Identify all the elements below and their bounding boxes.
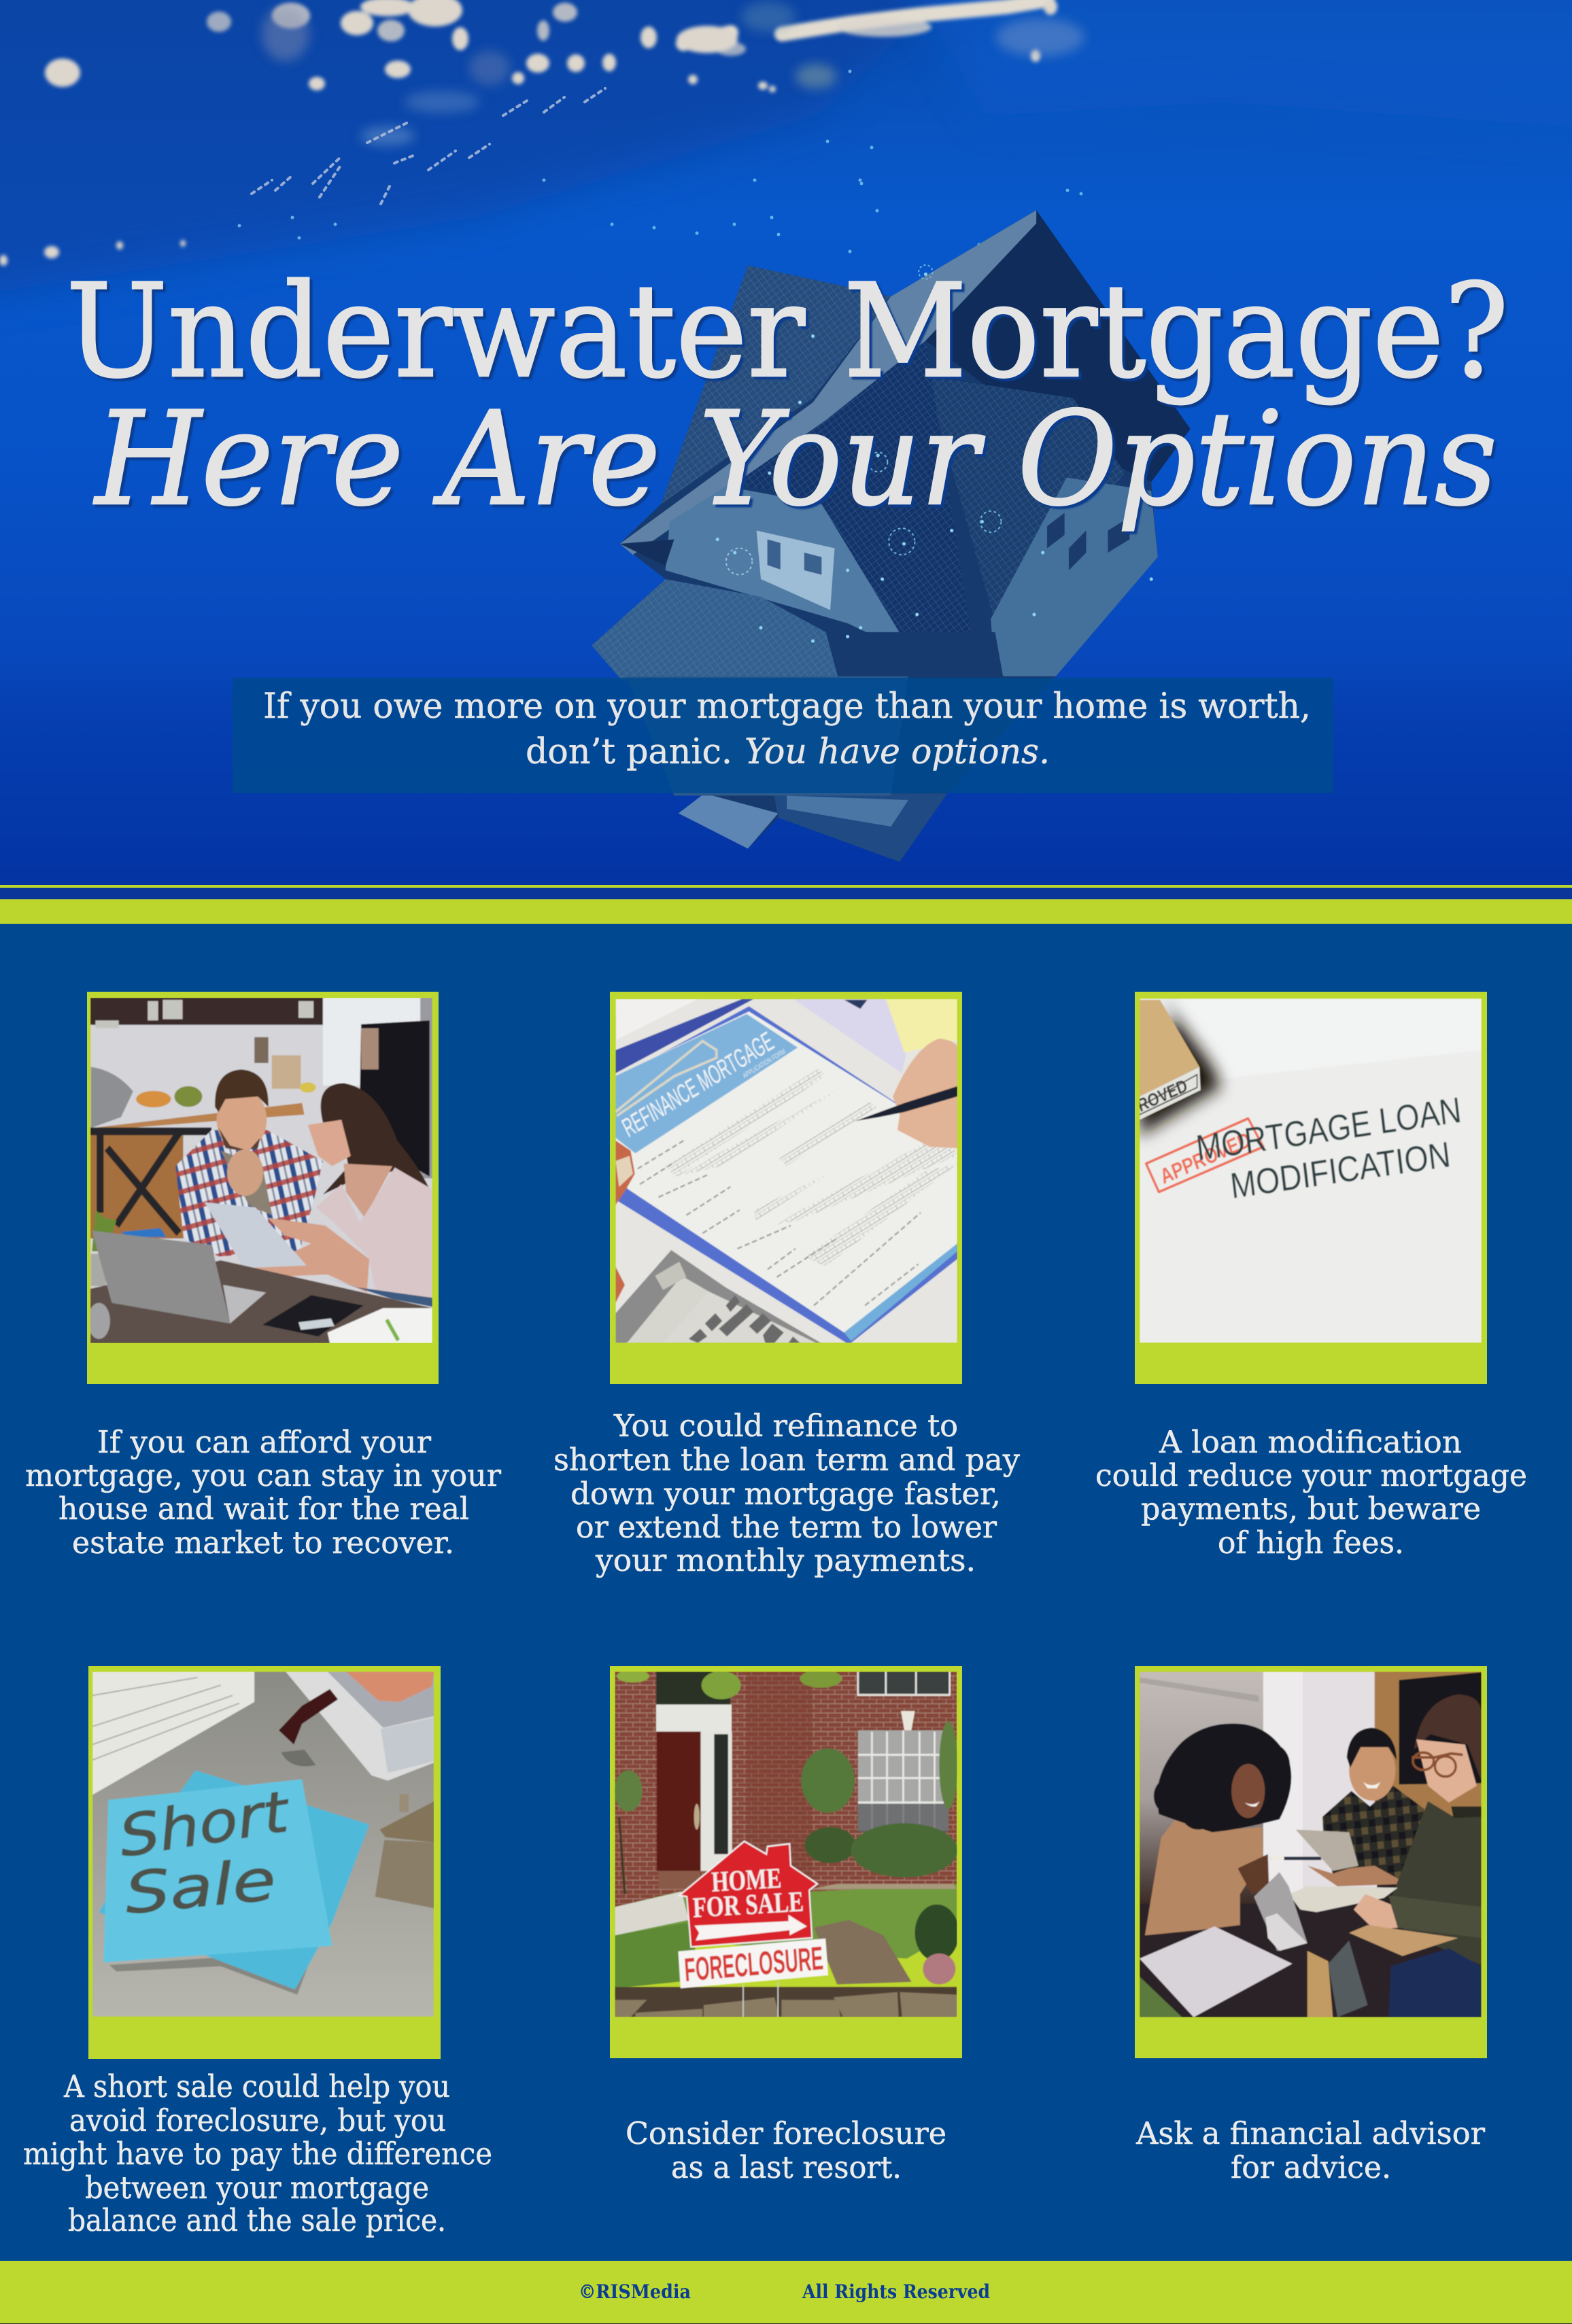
footer [0, 2261, 1572, 2324]
caption 5: Consider foreclosure [626, 2115, 946, 2151]
caption 2 [553, 1408, 1021, 1578]
photo: mortgage loan modification document: MODIFICATION [1228, 1134, 1452, 1207]
caption 4: balance and the sale price. [68, 2202, 446, 2238]
subtitle callout: You have options. [745, 732, 1050, 772]
subtitle callout: don’t panic. [526, 732, 732, 772]
photo: foreclosure home for sale sign: FOR SALE [692, 1885, 804, 1924]
photo: short sale sticky note: Short [116, 1777, 294, 1870]
photo: short sale sticky note: Sale [122, 1846, 278, 1927]
caption 5 [626, 2115, 946, 2185]
caption 1: house and wait for the real [58, 1491, 469, 1527]
title [66, 256, 1509, 534]
card 6: financial advisor [1135, 1666, 1487, 2058]
photo: advisor meeting [1140, 1671, 1482, 2017]
card 3: loan modification [1135, 992, 1487, 1384]
house illustration [592, 210, 1191, 862]
caption 3: of high fees. [1218, 1525, 1404, 1561]
caption 6: Ask a financial advisor [1135, 2115, 1485, 2151]
card 5: foreclosure [610, 1666, 962, 2058]
caption 2: down your mortgage faster, [570, 1476, 1001, 1512]
photo: refinance mortgage form: REFINANCE MORTGAGE [618, 1026, 779, 1143]
caption 1: If you can afford your [97, 1424, 431, 1460]
caption 4: A short sale could help you [63, 2068, 450, 2104]
subtitle callout [233, 678, 1333, 793]
title: Here Are Your Options [93, 384, 1497, 534]
water speckles [252, 88, 605, 204]
surface shimmer [262, 2, 1084, 145]
caption 4: avoid foreclosure, but you [69, 2102, 446, 2138]
caption 1: estate market to recover. [72, 1525, 454, 1561]
caption 6 [1135, 2115, 1485, 2185]
caption 5: as a last resort. [671, 2149, 902, 2185]
caption 1 [25, 1424, 501, 1561]
caption 4: between your mortgage [85, 2170, 429, 2206]
title: Underwater Mortgage? [66, 256, 1509, 406]
subtitle callout: If you owe more on your mortgage than your home is worth, [263, 687, 1311, 727]
card 2: refinance [610, 992, 962, 1384]
caption 4 [23, 2068, 492, 2238]
caption 6: for advice. [1231, 2149, 1391, 2185]
hero panel: underwater scene [0, 0, 1572, 952]
caption 2: or extend the term to lower [576, 1509, 997, 1545]
photo: short sale sticky note [92, 1671, 434, 2017]
caption 3: A loan modification [1159, 1424, 1462, 1460]
photo: mortgage loan modification document: ROVED [1135, 1076, 1190, 1116]
photo: couple reviewing paperwork [88, 998, 432, 1343]
water surface foam [0, 0, 1057, 266]
photo: foreclosure home for sale sign [615, 1669, 959, 2017]
card 1: stay in your house [87, 992, 439, 1384]
photo: mortgage loan modification document [1135, 999, 1482, 1343]
photo: foreclosure home for sale sign: FORECLOSURE [683, 1939, 825, 1988]
photo: foreclosure home for sale sign: HOME [711, 1862, 782, 1898]
caption 2: You could refinance to [613, 1408, 958, 1444]
caption 1: mortgage, you can stay in your [25, 1457, 501, 1493]
photo: refinance mortgage form: APPLICATION FORM [742, 1048, 787, 1080]
caption 2: your monthly payments. [595, 1542, 976, 1578]
photo: mortgage loan modification document: MORTGAGE LOAN [1194, 1089, 1463, 1168]
footer: ©RISMedia [579, 2280, 691, 2303]
caption 3: payments, but beware [1141, 1491, 1481, 1527]
caption 2: shorten the loan term and pay [553, 1442, 1021, 1478]
divider bands [0, 885, 1572, 924]
photo: refinance mortgage form [615, 999, 957, 1343]
caption 3 [1095, 1424, 1527, 1561]
caption 4: might have to pay the difference [23, 2136, 492, 2172]
caption 3: could reduce your mortgage [1095, 1457, 1527, 1493]
photo: mortgage loan modification document: APPROVED [1157, 1128, 1254, 1189]
card 4: short sale [88, 1666, 441, 2059]
footer: All Rights Reserved [802, 2280, 990, 2303]
